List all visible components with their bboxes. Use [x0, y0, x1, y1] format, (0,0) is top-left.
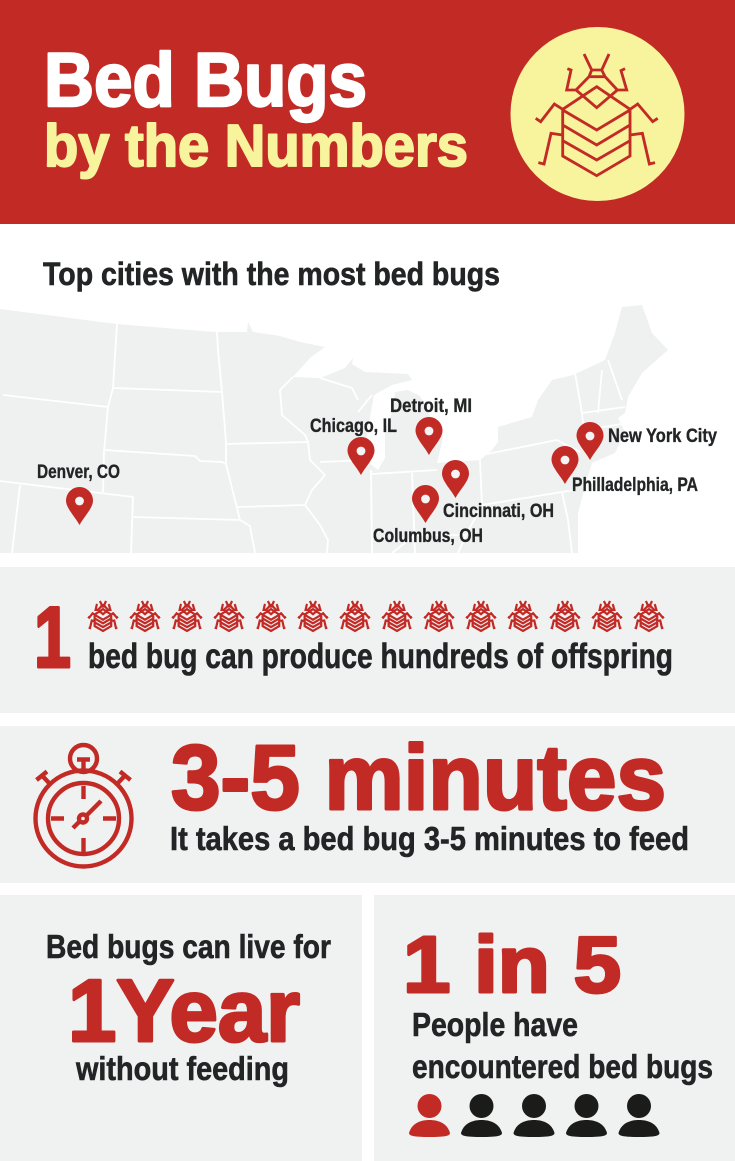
pin: Cincinnati [442, 460, 469, 498]
label: Cincinnati: Cincinnati, OH [443, 501, 554, 522]
pin: Detroit [416, 417, 442, 455]
label: Chicago: Chicago, IL [310, 416, 397, 437]
label: Denver: Denver, CO [37, 462, 120, 483]
pin: Chicago [348, 437, 374, 475]
title: Bed Bugs: Bed Bugs [44, 38, 367, 123]
panel: one year [0, 895, 362, 1161]
text: people have: People have [412, 1006, 578, 1043]
icon row: people [409, 1094, 660, 1137]
big heading: 1 Year: 1Year [68, 961, 300, 1060]
pin: Philadelphia [552, 446, 578, 484]
text: without feeding: without feeding [75, 1050, 289, 1087]
subtitle: by the Numbers: by the Numbers [44, 113, 468, 179]
map: cities with pins [0, 305, 717, 553]
big heading: 3-5 minutes: 3-5 minutes [171, 727, 666, 829]
pin: Denver [66, 487, 93, 525]
big number 1: 1 [34, 590, 71, 686]
heading: top cities: Top cities with the most bed bugs [43, 256, 500, 292]
panel: one in five [374, 895, 735, 1161]
icon: bed bug in yellow circle [510, 27, 684, 201]
icon row: bed bugs [88, 601, 664, 631]
big heading: 1 in 5: 1 in 5 [403, 920, 621, 1009]
panel: feeding time [0, 726, 735, 883]
label: New York City: New York City [608, 426, 717, 447]
pin: New York City [576, 422, 604, 460]
pin: Columbus [412, 485, 439, 523]
map state borders [0, 324, 625, 553]
label: Columbus: Columbus, OH [373, 526, 483, 547]
label: Philadelphia: Philladelphia, PA [572, 475, 698, 496]
text: can live for: Bed bugs can live for [46, 928, 331, 965]
icon: stopwatch [36, 745, 132, 866]
panel: header banner [0, 0, 735, 224]
map land [0, 305, 668, 553]
label: Detroit: Detroit, MI [390, 396, 472, 417]
panel: offspring [0, 567, 735, 713]
